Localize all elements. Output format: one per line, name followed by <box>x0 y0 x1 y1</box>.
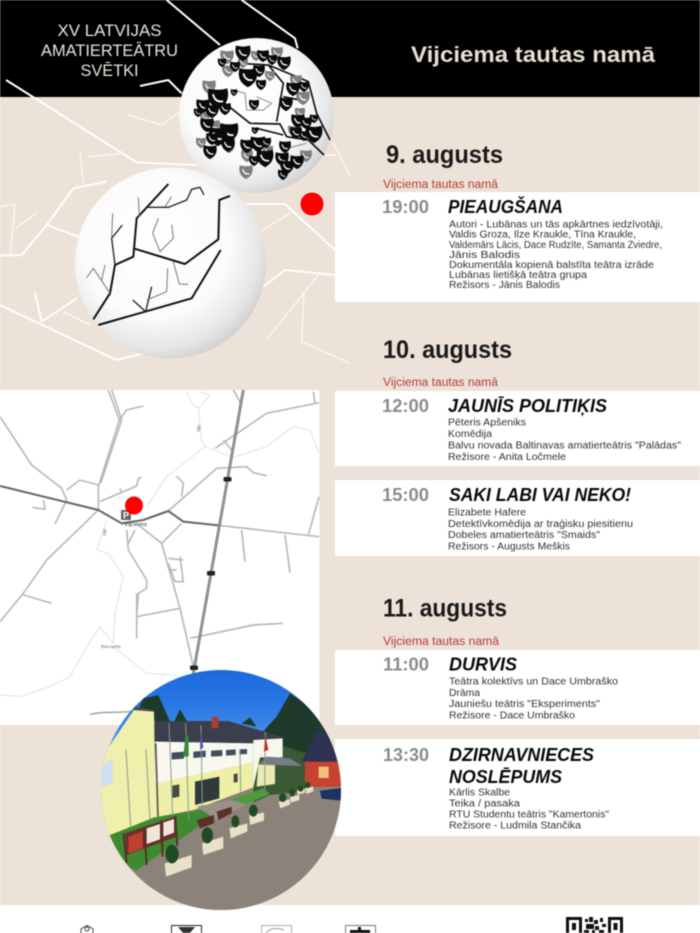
time: 15:00 <box>382 485 429 505</box>
show details: Drāma <box>449 688 480 699</box>
title line 1: XV LATVIJAS <box>58 21 162 40</box>
show title: PIEAUGŠANA <box>448 196 563 217</box>
show title: DZIRNAVNIECES <box>449 745 594 765</box>
logo: emblem 2 <box>172 926 202 933</box>
show details: Režisore - Ludmila Stančika <box>449 820 581 832</box>
show details: Autori - Lubānas un tās apkārtnes iedzīvotāji, <box>449 220 663 230</box>
logo: emblem 3 <box>262 926 292 933</box>
logo: coat of arms <box>81 926 93 933</box>
map label: Bācupīte: Bācupīte <box>101 644 122 649</box>
show details <box>449 676 618 722</box>
event card: Durvis <box>335 650 700 725</box>
header band <box>0 0 700 97</box>
show details: Lubānas lietišķā teātra grupa <box>449 270 587 281</box>
show title: NOSLĒPUMS <box>449 767 562 787</box>
parking icon <box>121 510 131 520</box>
parking icon: P <box>123 510 129 520</box>
day heading: 9. augusts <box>386 141 503 169</box>
event card: Saki labi vai neko <box>335 480 700 556</box>
header title <box>41 21 178 80</box>
show title: DURVIS <box>449 654 517 674</box>
sphere: theatre mask tree <box>179 38 334 193</box>
show title: SAKI LABI VAI NEKO! <box>449 485 631 505</box>
event card: Jaunīs politiķis <box>335 391 700 466</box>
event card: Dzirnavnieces noslēpums <box>335 739 700 836</box>
show details: Režisors - Augusts Meškis <box>448 542 570 552</box>
show details: Elizabete Hafere <box>448 508 526 518</box>
show details: Jānis Balodis <box>449 250 520 261</box>
map label: Vijciems: Vijciems <box>124 522 148 528</box>
logo: emblem 4 <box>346 926 376 933</box>
header venue: Vijciema tautas namā <box>411 42 656 67</box>
map location marker <box>125 496 143 514</box>
photo: Vijciems community house <box>100 670 343 913</box>
location marker: red dot <box>300 192 324 216</box>
grey masks <box>196 47 312 179</box>
panel: road map <box>0 390 320 725</box>
decorative white road network <box>0 0 351 363</box>
show details: Kārlis Skalbe <box>449 788 510 798</box>
show details: Jauniešu teātris "Eksperiments" <box>449 699 600 710</box>
show details: Pēteris Apšeniks <box>448 418 526 428</box>
event card: Pieaugšana <box>335 192 700 302</box>
show details: Valdis Groza, Ilze Kraukle, Tīna Kraukle, <box>449 230 636 240</box>
sphere: bare tree <box>75 168 266 358</box>
show details: Komēdija <box>448 429 492 440</box>
day heading: 10. augusts <box>383 336 512 364</box>
show title: JAUNĪS POLITIĶIS <box>448 396 607 416</box>
time: 12:00 <box>382 396 429 416</box>
show details <box>449 220 663 291</box>
show details: Dokumentāla kopienā balstīta teātra izrāde <box>449 260 654 271</box>
section: 10 August <box>335 336 700 556</box>
show title <box>449 745 594 787</box>
map label: river 1: Vije <box>196 424 201 432</box>
time: 11:00 <box>383 654 429 674</box>
highway shield 1 <box>224 477 232 482</box>
footer band <box>0 905 700 933</box>
show details: Režisors - Jānis Balodis <box>449 280 560 291</box>
show details: Detektīvkomēdija ar traģisku piesitienu <box>448 517 633 530</box>
QR code <box>566 917 623 933</box>
black masks <box>194 46 322 180</box>
highway shield 2 <box>207 571 215 576</box>
show details: Teātra kolektīvs un Dace Umbraško <box>449 676 618 688</box>
show details <box>448 418 681 463</box>
show details: Valdemārs Lācis, Dace Rudzīte, Samanta Zviedre, <box>449 240 662 251</box>
section: 11 August <box>335 594 700 836</box>
time: 19:00 <box>382 197 429 217</box>
title line 3: SVĒTKI <box>80 61 138 80</box>
show details: Teika / pasaka <box>449 798 520 810</box>
map label: river 2: Vije <box>102 528 107 536</box>
show details: Režisore - Dace Umbraško <box>449 710 575 722</box>
show details <box>448 508 633 552</box>
show details <box>449 788 609 832</box>
venue label: Vijciema tautas namā <box>383 636 500 648</box>
venue label: Vijciema tautas namā <box>383 179 499 191</box>
show details: Režisore - Anita Ločmele <box>448 452 566 463</box>
day heading: 11. augusts <box>383 594 507 622</box>
time: 13:30 <box>383 745 429 765</box>
venue label: Vijciema tautas namā <box>383 377 499 389</box>
show details: Balvu novada Baltinavas amatierteātris "Palādas" <box>448 440 681 452</box>
title line 2: AMATIERTEĀTRU <box>41 41 178 60</box>
highway shield 3 <box>190 666 198 670</box>
section: 9 August <box>335 141 700 302</box>
show details: Dobeles amatierteātris "Smaids" <box>448 530 600 541</box>
show details: RTU Studentu teātris "Kamertonis" <box>449 810 609 820</box>
